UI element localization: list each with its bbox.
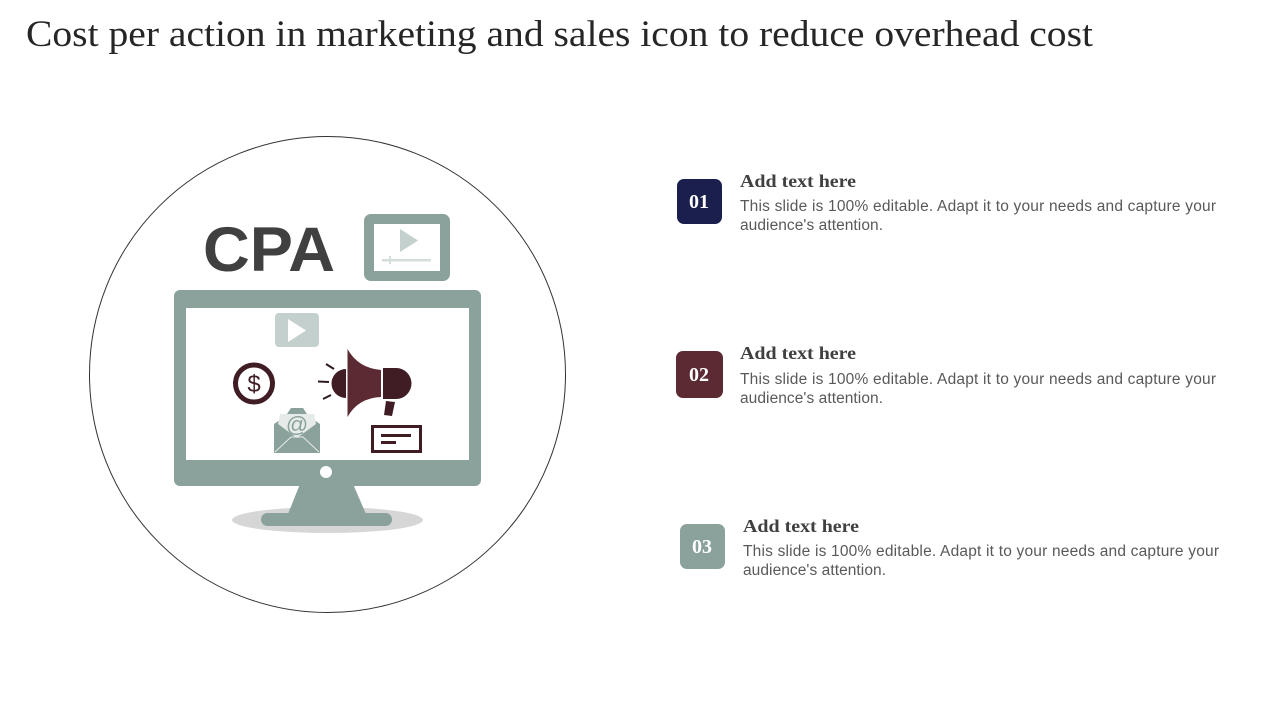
label: CPA: CPA bbox=[203, 215, 335, 285]
icon: envelope with at sign: @ bbox=[286, 412, 308, 437]
icon: card bbox=[372, 426, 420, 452]
badge 02: 02 bbox=[689, 364, 709, 386]
icon: monitor bbox=[174, 290, 481, 526]
body 03: This slide is 100% editable. Adapt it to your needs and capture your bbox=[743, 543, 1219, 560]
body 01: This slide is 100% editable. Adapt it to your needs and capture your bbox=[740, 198, 1216, 215]
heading 02: Add text here bbox=[740, 343, 856, 363]
icon: video player tablet bbox=[364, 214, 450, 281]
outline circle bbox=[90, 136, 566, 612]
list item 03 bbox=[680, 516, 1219, 579]
icon: envelope with at sign bbox=[274, 408, 320, 453]
badge 01 bbox=[677, 179, 722, 224]
body 02: This slide is 100% editable. Adapt it to your needs and capture your bbox=[740, 371, 1216, 388]
list item 01: audience's attention. bbox=[740, 217, 883, 234]
badge 03: 03 bbox=[692, 536, 712, 558]
list item 01 bbox=[677, 171, 1216, 234]
list item 02 bbox=[676, 343, 1216, 407]
badge 02 bbox=[676, 351, 723, 398]
heading 01: Add text here bbox=[740, 171, 856, 191]
heading 03: Add text here bbox=[743, 516, 859, 536]
icon: dollar coin bbox=[236, 365, 272, 402]
badge 01: 01 bbox=[689, 191, 709, 213]
monitor shadow bbox=[232, 507, 423, 533]
panel: circle illustration bbox=[90, 136, 566, 612]
badge 03 bbox=[680, 524, 725, 569]
icon: play button bbox=[275, 313, 319, 347]
title: Cost per action in marketing and sales icon to reduce overhead cost bbox=[26, 13, 1093, 54]
list item 02: audience's attention. bbox=[740, 390, 883, 407]
list item 03: audience's attention. bbox=[743, 562, 886, 579]
icon: megaphone bbox=[318, 349, 411, 417]
icon: dollar coin: $ bbox=[247, 371, 261, 398]
